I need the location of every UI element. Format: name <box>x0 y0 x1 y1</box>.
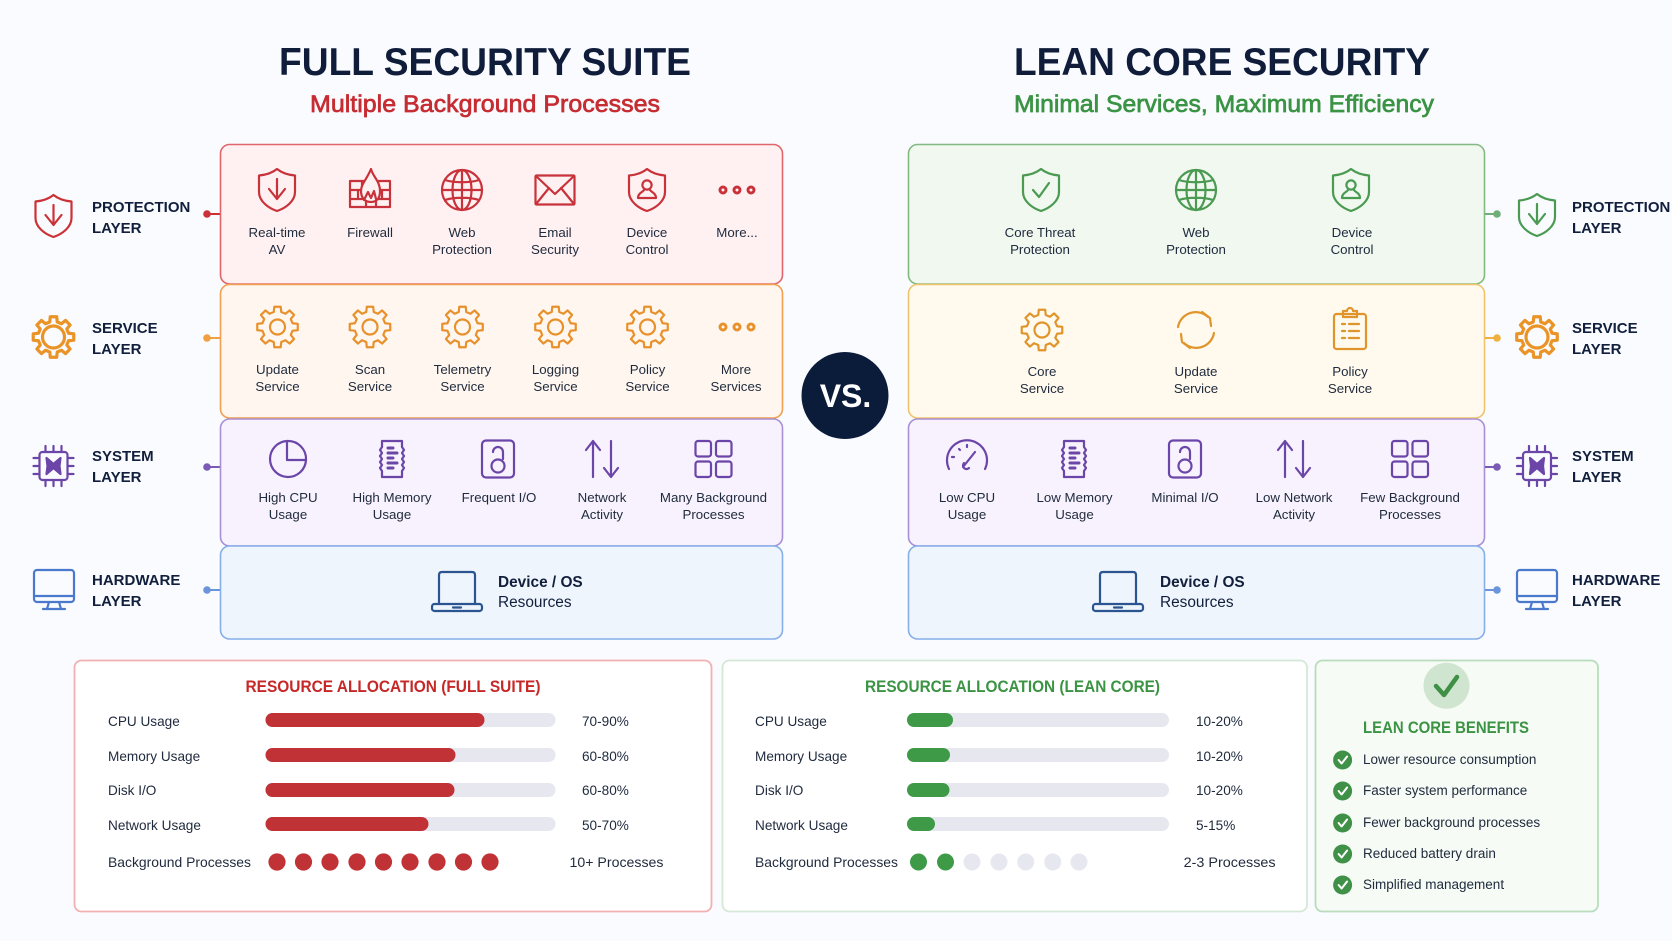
item: more services: Services <box>710 379 762 394</box>
label: hardware layer: HARDWARE <box>1572 572 1660 589</box>
item: update service <box>255 307 300 394</box>
benefit: lower resource consumption <box>1333 750 1536 770</box>
heading: lean core security <box>1014 41 1434 118</box>
text: device os resources: Device / OS <box>1160 574 1245 591</box>
item: frequent io <box>462 440 536 505</box>
panel: lean core protection layer <box>908 144 1484 284</box>
heading: RESOURCE ALLOCATION (FULL SUITE) <box>246 678 540 696</box>
subtitle: full suite: Multiple Background Processes <box>310 91 660 118</box>
item: high memory usage: Usage <box>373 507 411 522</box>
item: real-time AV <box>249 169 305 257</box>
item: low memory usage: Low Memory <box>1036 490 1113 505</box>
benefit: fewer background processes <box>1333 814 1540 832</box>
item: many background processes: Many Background <box>660 490 767 505</box>
panel: full suite system layer <box>220 419 782 546</box>
item: email security <box>531 176 579 257</box>
panel: resource allocation full suite <box>74 660 712 912</box>
row: background processes: 2-3 Processes <box>1184 855 1276 870</box>
label: protection layer <box>1519 194 1670 237</box>
label: system layer: SYSTEM <box>1572 448 1634 465</box>
panel: lean core system layer <box>908 419 1484 546</box>
label: protection layer <box>36 195 190 237</box>
item: many background processes: Processes <box>682 507 745 522</box>
label: protection layer: LAYER <box>1572 220 1622 237</box>
row: background processes: Background Processes <box>755 855 898 870</box>
item: high cpu usage <box>258 441 318 522</box>
benefit: reduced battery drain <box>1333 844 1496 864</box>
label: system layer <box>34 446 154 486</box>
heading: full security suite <box>279 41 691 118</box>
item: network activity: Network <box>578 490 627 505</box>
icon: laptop <box>1093 572 1143 611</box>
item: low network activity: Low Network <box>1256 490 1333 505</box>
item: policy service: Policy <box>1332 364 1368 379</box>
item: policy service: Policy <box>630 362 666 377</box>
icon: laptop <box>432 572 482 611</box>
item: device control: Control <box>1331 242 1373 257</box>
item: firewall: Firewall <box>347 225 393 240</box>
text: device os resources: Resources <box>498 594 572 611</box>
badge: versus <box>802 352 888 439</box>
label: system layer <box>1517 446 1634 486</box>
panel: lean core service layer <box>908 284 1484 418</box>
item: email security: Email <box>538 225 572 240</box>
item: policy service: Service <box>1328 381 1372 396</box>
item: logging service <box>532 307 579 394</box>
panel: resource allocation lean core <box>722 660 1307 912</box>
label: service layer <box>33 317 158 358</box>
item: scan service: Scan <box>355 362 385 377</box>
item: policy service: Service <box>625 379 670 394</box>
item: email security: Security <box>531 242 579 257</box>
row: network usage: Network Usage <box>108 818 201 833</box>
right connectors <box>1485 210 1501 594</box>
item: firewall <box>347 169 393 240</box>
item: telemetry service: Telemetry <box>434 362 492 377</box>
label: hardware layer: LAYER <box>1572 593 1622 610</box>
item: policy service <box>625 307 670 394</box>
label: service layer: SERVICE <box>1572 320 1638 337</box>
item: more services <box>710 324 762 394</box>
item: device control: Control <box>626 242 668 257</box>
row: disk io: Disk I/O <box>108 783 156 798</box>
label: protection layer: PROTECTION <box>1572 199 1670 216</box>
title: lean core: LEAN CORE SECURITY <box>1014 41 1430 84</box>
item: scan service: Service <box>348 379 392 394</box>
item: low memory usage <box>1036 441 1113 522</box>
label: system layer: LAYER <box>1572 469 1622 486</box>
icon: check badge <box>1424 663 1470 709</box>
item: update service: Service <box>255 379 300 394</box>
label: service layer: LAYER <box>1572 341 1622 358</box>
item: core service <box>1020 310 1064 396</box>
item: network activity <box>578 441 627 522</box>
item: high cpu usage: High CPU <box>258 490 318 505</box>
row: memory usage <box>108 748 629 764</box>
item: few background processes: Few Background <box>1360 490 1460 505</box>
row: disk io: 60-80% <box>582 783 629 798</box>
item: low cpu usage: Low CPU <box>939 490 995 505</box>
panel: full suite protection layer <box>220 144 782 284</box>
row: network usage: Network Usage <box>755 818 848 833</box>
row: memory usage: Memory Usage <box>108 749 200 764</box>
benefit: faster system performance: Faster system performance <box>1363 783 1527 798</box>
label: system layer: LAYER <box>92 469 142 486</box>
panel: lean core benefits <box>1316 660 1598 912</box>
left connectors <box>203 210 220 594</box>
heading: LEAN CORE BENEFITS <box>1363 719 1529 737</box>
row: background processes: 10+ Processes <box>570 855 664 870</box>
benefit: reduced battery drain: Reduced battery drain <box>1363 846 1496 861</box>
item: logging service: Service <box>533 379 578 394</box>
row: background processes: Background Processes <box>108 855 251 870</box>
item: update service <box>1174 312 1218 396</box>
item: more <box>716 187 758 240</box>
item: low network activity <box>1256 441 1333 522</box>
row: memory usage: 60-80% <box>582 749 629 764</box>
benefit: fewer background processes: Fewer background processes <box>1363 815 1540 830</box>
item: network activity: Activity <box>581 507 623 522</box>
item: few background processes: Processes <box>1379 507 1441 522</box>
item: update service: Update <box>1175 364 1217 379</box>
panel: full suite hardware layer <box>220 546 782 639</box>
item: device control <box>1331 169 1373 257</box>
benefit: lower resource consumption: Lower resource consumption <box>1363 752 1536 767</box>
item: policy service <box>1328 308 1372 396</box>
item: low cpu usage <box>939 440 995 522</box>
panel: lean core hardware layer <box>908 546 1484 639</box>
item: low memory usage: Usage <box>1055 507 1094 522</box>
row: network usage: 50-70% <box>582 818 629 833</box>
label: system layer: SYSTEM <box>92 448 154 465</box>
item: few background processes <box>1360 441 1460 522</box>
row: disk io: 10-20% <box>1196 783 1243 798</box>
item: telemetry service <box>434 307 492 394</box>
row: network usage <box>108 817 629 833</box>
row: cpu usage: CPU Usage <box>108 714 180 729</box>
label: hardware layer: LAYER <box>92 593 142 610</box>
row: network usage: 5-15% <box>1196 818 1235 833</box>
item: device control: Device <box>1332 225 1372 240</box>
item: web protection <box>1166 170 1226 257</box>
row: network usage <box>755 817 1235 833</box>
item: minimal io: Minimal I/O <box>1151 490 1219 505</box>
heading: RESOURCE ALLOCATION (LEAN CORE) <box>865 678 1160 696</box>
title: full suite: FULL SECURITY SUITE <box>279 41 691 84</box>
item: core threat protection: Core Threat <box>1005 225 1076 240</box>
item: web protection: Web <box>1182 225 1210 240</box>
label: hardware layer: HARDWARE <box>92 572 180 589</box>
label: service layer: SERVICE <box>92 320 158 337</box>
item: high memory usage <box>352 441 432 522</box>
item: telemetry service: Service <box>440 379 485 394</box>
subtitle: lean core: Minimal Services, Maximum Efficiency <box>1014 91 1434 118</box>
item: more services: More <box>721 362 751 377</box>
item: minimal io <box>1151 440 1219 505</box>
row: cpu usage: 10-20% <box>1196 714 1243 729</box>
item: scan service <box>348 307 392 394</box>
item: more: More... <box>716 225 758 240</box>
row: disk io <box>108 783 629 798</box>
item: device control <box>626 169 668 257</box>
item: web protection: Protection <box>1166 242 1226 257</box>
row: cpu usage: 70-90% <box>582 714 629 729</box>
row: memory usage <box>755 748 1243 764</box>
panel: full suite service layer <box>220 284 782 418</box>
item: web protection: Web <box>448 225 476 240</box>
row: memory usage: Memory Usage <box>755 749 847 764</box>
item: device control: Device <box>627 225 667 240</box>
item: core service: Service <box>1020 381 1064 396</box>
benefit: simplified management: Simplified management <box>1363 877 1504 892</box>
benefit: faster system performance <box>1333 782 1527 800</box>
item: core threat protection <box>1005 169 1076 257</box>
item: low cpu usage: Usage <box>948 507 986 522</box>
item: high memory usage: High Memory <box>352 490 432 505</box>
item: real-time AV: AV <box>269 242 285 257</box>
label: hardware layer <box>1517 570 1660 610</box>
row: memory usage: 10-20% <box>1196 749 1243 764</box>
row: cpu usage: CPU Usage <box>755 714 827 729</box>
item: many background processes <box>660 441 767 522</box>
label: protection layer: PROTECTION <box>92 199 190 216</box>
item: web protection <box>432 170 492 257</box>
row: disk io <box>755 783 1243 798</box>
item: real-time AV: Real-time <box>249 225 305 240</box>
row: background processes <box>108 853 664 871</box>
row: disk io: Disk I/O <box>755 783 803 798</box>
label: hardware layer <box>34 570 180 610</box>
item: web protection: Protection <box>432 242 492 257</box>
right layer labels <box>1517 194 1670 610</box>
label: protection layer: LAYER <box>92 220 142 237</box>
item: core service: Core <box>1028 364 1056 379</box>
label: service layer: LAYER <box>92 341 142 358</box>
item: logging service: Logging <box>532 362 579 377</box>
row: cpu usage <box>755 713 1243 729</box>
row: background processes <box>755 854 1276 870</box>
item: update service: Update <box>256 362 299 377</box>
row: cpu usage <box>108 713 629 729</box>
label: service layer <box>1517 317 1638 358</box>
benefit: simplified management <box>1333 876 1504 894</box>
text: device os resources: Resources <box>1160 594 1234 611</box>
item: high cpu usage: Usage <box>269 507 307 522</box>
item: update service: Service <box>1174 381 1218 396</box>
item: frequent io: Frequent I/O <box>462 490 536 505</box>
left layer labels <box>33 195 190 610</box>
text: device os resources: Device / OS <box>498 574 583 591</box>
item: low network activity: Activity <box>1273 507 1315 522</box>
item: core threat protection: Protection <box>1010 242 1070 257</box>
badge: versus: VS. <box>820 378 871 414</box>
